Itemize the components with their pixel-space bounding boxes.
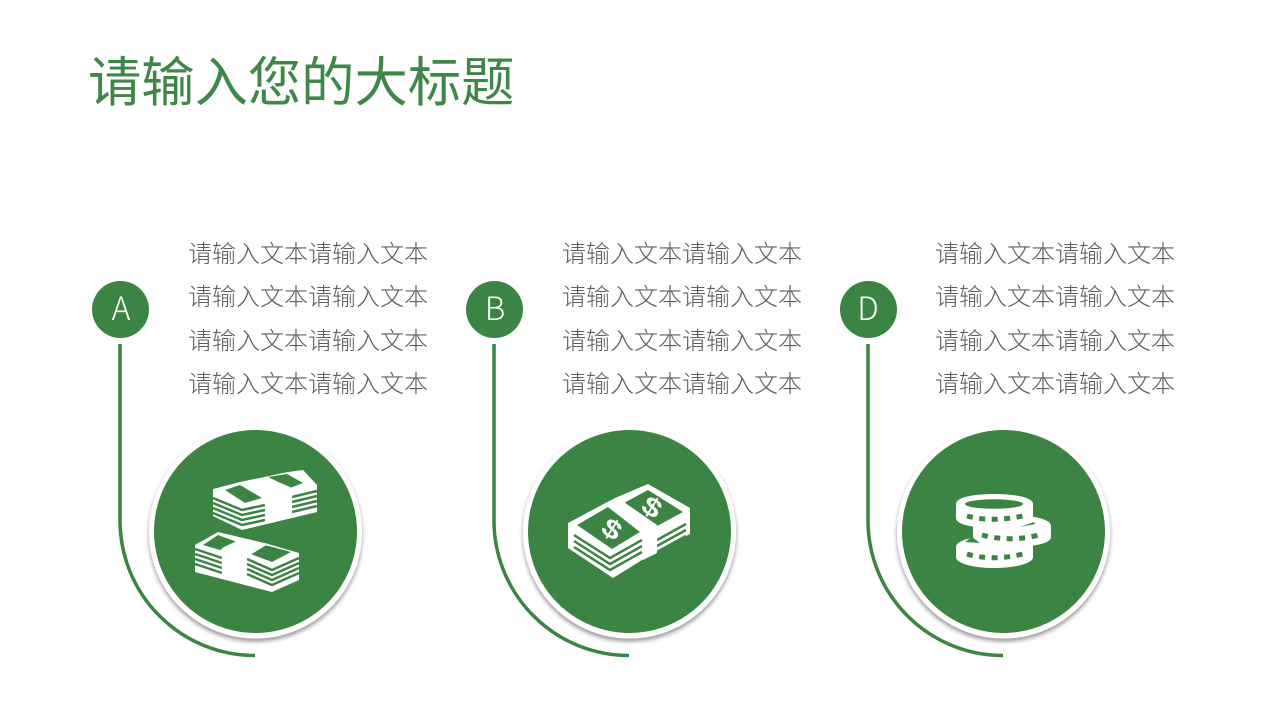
text block: B: 请输入文本请输入文本 <box>562 241 802 268</box>
icon circle: A <box>149 426 362 638</box>
icon: two money stacks <box>195 470 317 592</box>
text block: D <box>935 241 1175 398</box>
text block: A <box>188 241 428 398</box>
icon: coins <box>956 494 1051 568</box>
curved connector: D <box>868 344 1003 656</box>
badge: B: B <box>485 284 505 330</box>
badge: D <box>840 281 897 338</box>
text block: A: 请输入文本请输入文本 <box>188 284 428 311</box>
text block: D: 请输入文本请输入文本 <box>935 328 1175 355</box>
panel: B <box>466 241 802 656</box>
badge: A <box>92 281 149 338</box>
badge: D: D <box>857 284 879 330</box>
text block: B <box>562 241 802 398</box>
curved connector: B <box>494 344 629 656</box>
icon circle: D <box>897 426 1110 638</box>
text block: A: 请输入文本请输入文本 <box>188 241 428 268</box>
text block: A: 请输入文本请输入文本 <box>188 328 428 355</box>
icon circle: B <box>523 426 736 638</box>
text block: D: 请输入文本请输入文本 <box>935 284 1175 311</box>
panel: A <box>92 241 428 656</box>
curved connector: A <box>120 344 255 656</box>
panel: D <box>840 241 1175 656</box>
text block: A: 请输入文本请输入文本 <box>188 371 428 398</box>
text block: B: 请输入文本请输入文本 <box>562 284 802 311</box>
icon: money bundle: $ <box>596 512 627 547</box>
text block: D: 请输入文本请输入文本 <box>935 371 1175 398</box>
text block: B: 请输入文本请输入文本 <box>562 328 802 355</box>
text block: B: 请输入文本请输入文本 <box>562 371 802 398</box>
badge: A: A <box>112 284 131 330</box>
badge: B <box>466 281 523 338</box>
text block: D: 请输入文本请输入文本 <box>935 241 1175 268</box>
icon: money bundle <box>568 484 690 578</box>
icon: money bundle: $ <box>636 490 667 525</box>
title: 请输入您的大标题 <box>88 54 514 113</box>
